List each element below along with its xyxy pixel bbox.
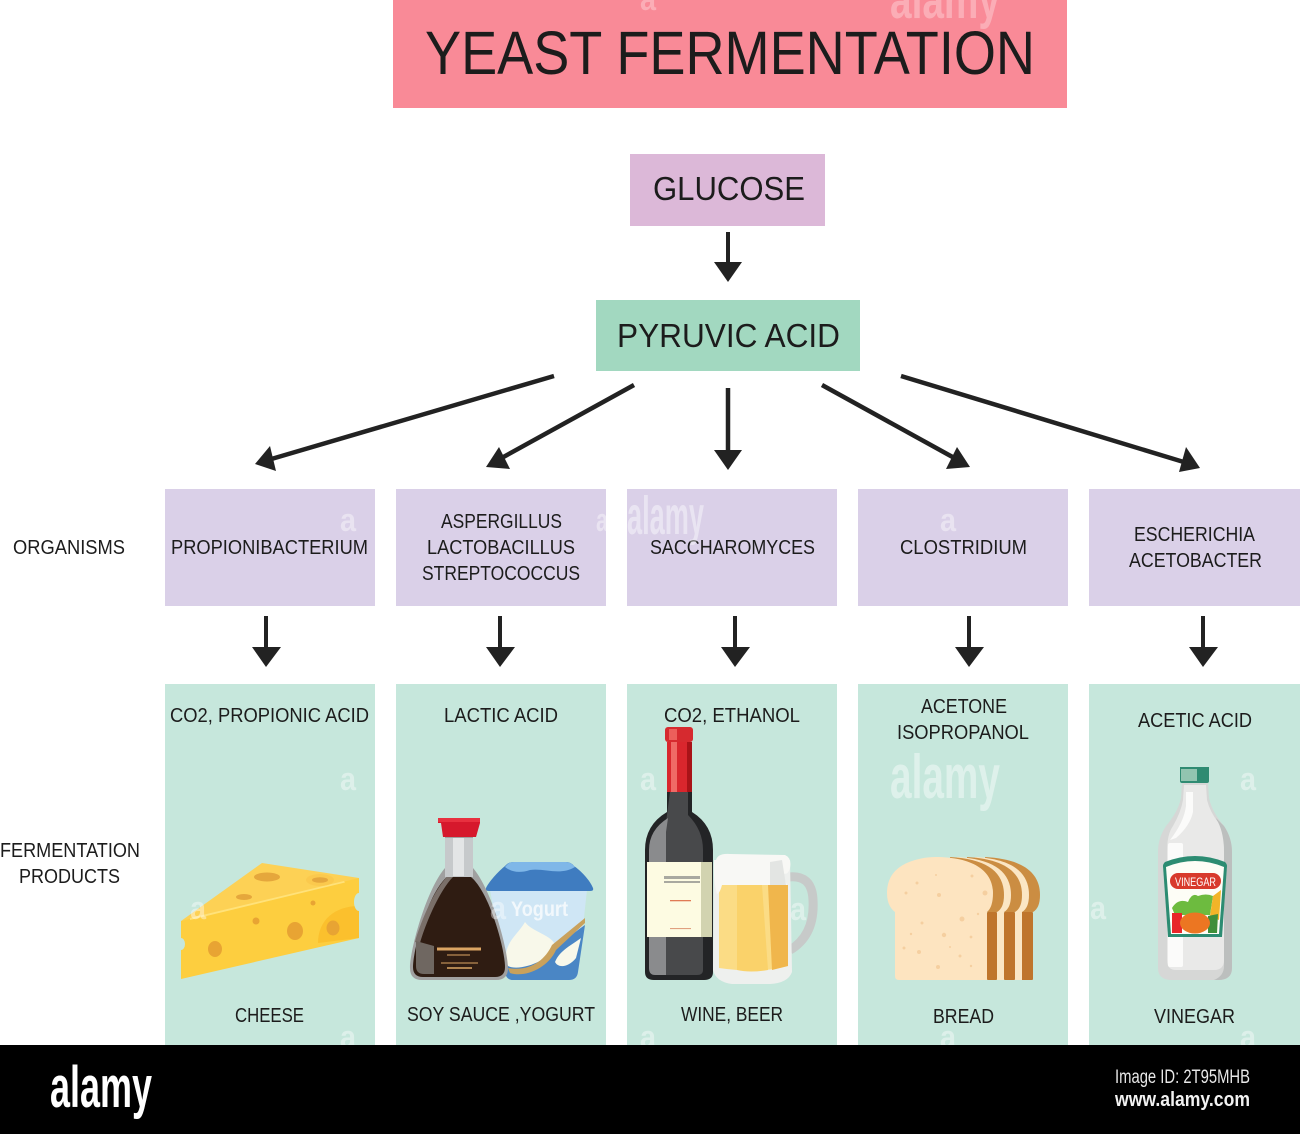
title: YEAST FERMENTATION bbox=[425, 19, 1035, 87]
organism: saccharomyces bbox=[627, 489, 837, 606]
watermarks: a bbox=[940, 1019, 956, 1055]
organism: propionibacterium bbox=[165, 489, 375, 606]
panel: wine and beer column bbox=[627, 684, 837, 1045]
footer bar: alamy credit: www.alamy.com bbox=[1114, 1089, 1250, 1111]
panel: cheese column bbox=[165, 684, 375, 1045]
watermarks: a bbox=[490, 890, 506, 926]
watermarks: a bbox=[940, 502, 956, 538]
panel: vinegar column bbox=[1089, 684, 1300, 1045]
watermarks: a bbox=[340, 1019, 356, 1055]
panel: cheese column: CO2, PROPIONIC ACID bbox=[170, 705, 369, 727]
icon: cheese bbox=[181, 863, 359, 979]
organism: clostridium: CLOSTRIDIUM bbox=[900, 537, 1027, 559]
title bbox=[393, 0, 1067, 108]
watermarks: a bbox=[640, 1019, 656, 1055]
watermarks: a bbox=[1090, 890, 1106, 926]
box: glucose: GLUCOSE bbox=[653, 170, 805, 207]
icon: soy sauce bottle bbox=[410, 818, 508, 980]
panel: bread column: ACETONE bbox=[921, 696, 1007, 718]
watermarks: a bbox=[596, 502, 608, 538]
watermarks: a bbox=[190, 890, 206, 926]
panel: soy sauce and yogurt column: LACTIC ACID bbox=[444, 705, 558, 727]
label: fermentation products: PRODUCTS bbox=[19, 866, 120, 888]
panel: vinegar column: ACETIC ACID bbox=[1138, 710, 1252, 732]
panel: wine and beer column: CO2, ETHANOL bbox=[664, 705, 800, 727]
icon: vinegar bottle: VINEGAR bbox=[1175, 875, 1216, 889]
organism: aspergillus, lactobacillus, streptococcus: ASPERGILLUS bbox=[441, 511, 562, 533]
organism: saccharomyces: SACCHAROMYCES bbox=[650, 537, 815, 559]
organism: escherichia, acetobacter: ESCHERICHIA bbox=[1134, 524, 1256, 546]
arrows: organisms to products bbox=[252, 616, 1218, 667]
panel: vinegar column: VINEGAR bbox=[1154, 1006, 1235, 1028]
panel: bread column: ISOPROPANOL bbox=[897, 722, 1029, 744]
label: fermentation products: FERMENTATION bbox=[0, 840, 140, 862]
organism: aspergillus, lactobacillus, streptococcus: STREPTOCOCCUS bbox=[422, 563, 580, 585]
icon: yogurt cup bbox=[486, 862, 593, 980]
icon: vinegar bottle bbox=[1158, 767, 1232, 980]
box: glucose bbox=[630, 154, 825, 226]
label: organisms: ORGANISMS bbox=[13, 537, 125, 559]
watermarks: a bbox=[640, 761, 656, 797]
icon: beer mug bbox=[713, 854, 813, 984]
panel: bread column: BREAD bbox=[933, 1006, 994, 1028]
box: pyruvic acid bbox=[596, 300, 860, 371]
watermarks: alamy bbox=[627, 486, 704, 546]
panel: wine and beer column: WINE, BEER bbox=[681, 1004, 783, 1026]
watermarks: a bbox=[1240, 1019, 1256, 1055]
icon: sliced bread bbox=[887, 857, 1040, 980]
footer bar: alamy credit bbox=[0, 1045, 1300, 1134]
watermarks bbox=[190, 0, 1256, 1055]
watermarks: a bbox=[340, 502, 356, 538]
organism: clostridium bbox=[858, 489, 1068, 606]
organism: propionibacterium: PROPIONIBACTERIUM bbox=[171, 537, 368, 559]
footer bar: alamy credit: alamy bbox=[50, 1055, 152, 1120]
icon: wine bottle bbox=[645, 727, 713, 980]
panel: bread column bbox=[858, 684, 1068, 1045]
panel: soy sauce and yogurt column bbox=[396, 684, 606, 1045]
watermarks: alamy bbox=[890, 743, 1000, 812]
organism: aspergillus, lactobacillus, streptococcus bbox=[396, 489, 606, 606]
organism: escherichia, acetobacter bbox=[1089, 489, 1300, 606]
box: pyruvic acid: PYRUVIC ACID bbox=[617, 317, 840, 354]
watermarks: a bbox=[1240, 761, 1256, 797]
organism: aspergillus, lactobacillus, streptococcus: LACTOBACILLUS bbox=[427, 537, 575, 559]
footer bar: alamy credit: Image ID: 2T95MHB bbox=[1115, 1067, 1250, 1088]
label: fermentation products bbox=[0, 840, 140, 888]
arrows: pyruvic acid to organisms bbox=[255, 376, 1200, 472]
icon: yogurt cup: Yogurt bbox=[511, 898, 568, 921]
watermarks: a bbox=[790, 891, 806, 927]
panel: soy sauce and yogurt column: SOY SAUCE ,YOGURT bbox=[407, 1004, 595, 1026]
arrow: glucose to pyruvic acid bbox=[714, 232, 742, 282]
watermarks: a bbox=[340, 761, 356, 797]
panel: cheese column: CHEESE bbox=[235, 1005, 304, 1027]
organism: escherichia, acetobacter: ACETOBACTER bbox=[1129, 550, 1262, 572]
